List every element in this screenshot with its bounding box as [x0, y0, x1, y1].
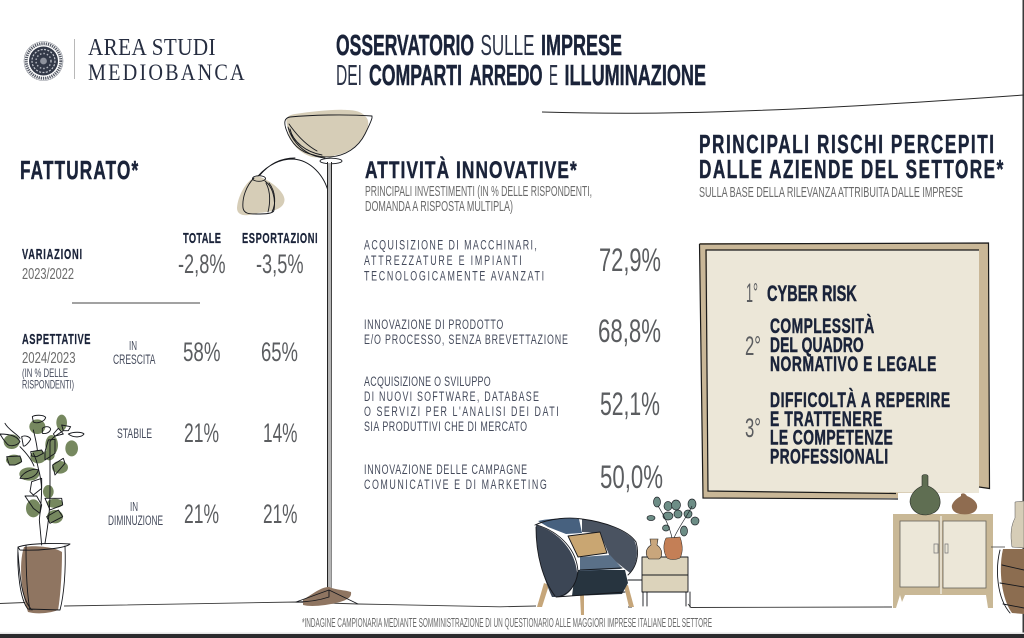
- logo wordmark: [88, 34, 245, 85]
- illustration: potted plant: [0, 415, 84, 613]
- lamp base: [296, 587, 358, 606]
- row: aspettative in crescita: 65%: [261, 337, 298, 367]
- panel: principali rischi: [699, 129, 1004, 499]
- heading: attività innovative: ATTIVITÀ INNOVATIVE*: [365, 157, 577, 184]
- item: macchinari 72,9%: 72,9%: [599, 242, 661, 278]
- title: IMPRESE: [541, 30, 622, 62]
- risk 3: competenze: 3°: [745, 413, 761, 443]
- row: variazioni: -3,5%: [256, 249, 304, 279]
- subheading: DOMANDA A RISPOSTA MULTIPLA): [365, 199, 513, 215]
- row: stabile: 21%: [184, 418, 219, 448]
- item: software 52,1%: SIA PRODUTTIVI CHE DI MERCATO: [364, 420, 527, 435]
- item: campagne 50,0%: [364, 459, 663, 495]
- title: ARREDO: [470, 60, 542, 92]
- risk 2: complessità: [745, 313, 936, 376]
- table: [628, 557, 690, 607]
- vase: green: [910, 474, 940, 515]
- risk 3: competenze: [745, 387, 950, 468]
- subheading: [365, 184, 592, 215]
- chair pillow: [568, 532, 607, 557]
- row: in diminuzione: 21%: [263, 499, 298, 529]
- row: variazioni: -2,8%: [178, 249, 226, 279]
- illustration: armchair: [535, 518, 638, 615]
- item: prodotto 68,8%: 68,8%: [598, 313, 661, 349]
- illustration: side table with vases and plant: [628, 497, 699, 607]
- risk 2: complessità: DEL QUADRO: [770, 333, 864, 357]
- title: OSSERVATORIO: [336, 30, 474, 62]
- risk 1: cyber risk: CYBER RISK: [767, 281, 857, 306]
- item: software 52,1%: [364, 375, 660, 435]
- column headers: [183, 230, 318, 247]
- column headers: ESPORTAZIONI: [242, 230, 318, 247]
- plant foliage: [0, 415, 84, 545]
- risk 3: competenze: LE COMPETENZE: [770, 426, 893, 449]
- lamp small shade: [237, 158, 329, 215]
- row: aspettative in crescita: CRESCITA: [113, 352, 156, 367]
- vase: brown: [952, 493, 977, 514]
- logo wordmark: AREA STUDI: [88, 34, 216, 60]
- risk 1: cyber risk: [746, 278, 857, 308]
- heading: principali rischi: [699, 129, 1004, 184]
- vase: terracotta: [664, 537, 682, 560]
- heading: principali rischi: DALLE AZIENDE DEL SETTORE*: [699, 154, 1004, 184]
- item: software 52,1%: O SERVIZI PER L'ANALISI DEI DATI: [364, 405, 559, 420]
- row: variazioni: 2023/2022: [22, 266, 74, 283]
- chair left wing: [536, 525, 577, 597]
- item: software 52,1%: DI NUOVI SOFTWARE, DATABASE: [364, 390, 539, 405]
- title: E: [549, 60, 558, 92]
- row: stabile: 14%: [263, 418, 298, 448]
- panel: fatturato: [20, 155, 318, 529]
- item: campagne 50,0%: COMUNICATIVE E DI MARKETING: [364, 478, 547, 493]
- row: aspettative in crescita: RISPONDENTI): [22, 378, 74, 392]
- title: DEI: [336, 60, 362, 92]
- item: macchinari 72,9%: ACQUISIZIONE DI MACCHINARI,: [364, 239, 537, 253]
- subheading: PRINCIPALI INVESTIMENTI (IN % DELLE RISPONDENTI,: [365, 184, 592, 200]
- eucalyptus plant: [647, 497, 699, 538]
- row: in diminuzione: DIMINUZIONE: [108, 513, 163, 528]
- floor line: [0, 602, 892, 608]
- logo: Area Studi Mediobanca: [24, 34, 245, 85]
- risk 3: competenze: E TRATTENERE: [770, 407, 882, 431]
- column headers: TOTALE: [183, 230, 221, 247]
- item: macchinari 72,9%: ATTREZZATURE E IMPIANTI: [364, 254, 522, 269]
- item: campagne 50,0%: 50,0%: [600, 459, 663, 495]
- risk 1: cyber risk: 1°: [746, 278, 758, 308]
- risk 2: complessità: COMPLESSITÀ: [770, 313, 874, 338]
- row: variazioni: VARIAZIONI: [22, 246, 82, 263]
- chair legs: [537, 583, 634, 615]
- row: stabile: [117, 418, 298, 448]
- panel: attività innovative: [364, 157, 663, 495]
- chair seat base: [572, 570, 628, 596]
- row: aspettative in crescita: [22, 331, 298, 392]
- heading: fatturato: FATTURATO*: [20, 155, 138, 185]
- row: in diminuzione: [108, 499, 298, 529]
- item: macchinari 72,9%: TECNOLOGICAMENTE AVANZATI: [364, 270, 544, 284]
- title: [336, 30, 706, 92]
- item: software 52,1%: ACQUISIZIONE O SVILUPPO: [364, 375, 491, 390]
- picture frame: [700, 243, 990, 499]
- illustration: cabinet with vases: [893, 474, 1024, 614]
- row: aspettative in crescita: (IN % DELLE: [22, 366, 68, 380]
- risk 3: competenze: PROFESSIONALI: [770, 445, 888, 468]
- heading: principali rischi: PRINCIPALI RISCHI PERCEPITI: [699, 129, 994, 159]
- row: in diminuzione: IN: [130, 499, 138, 514]
- title: SULLE: [480, 30, 534, 62]
- risk 2: complessità: NORMATIVO E LEGALE: [770, 352, 936, 376]
- item: campagne 50,0%: INNOVAZIONE DELLE CAMPAGNE: [364, 463, 527, 478]
- vase: pale: [1011, 501, 1024, 548]
- item: macchinari 72,9%: [364, 239, 661, 284]
- row: in diminuzione: 21%: [184, 499, 219, 529]
- plant pot: [18, 543, 70, 613]
- chair seat cushion: [580, 555, 622, 571]
- risk 3: competenze: DIFFICOLTÀ A REPERIRE: [770, 387, 950, 412]
- logo wordmark: MEDIOBANCA: [88, 60, 245, 85]
- chair top back: [538, 518, 582, 534]
- row: aspettative in crescita: 2024/2023: [22, 350, 76, 367]
- item: software 52,1%: 52,1%: [600, 386, 660, 422]
- row: variazioni: [22, 246, 304, 283]
- icon: Mediobanca seal: [24, 42, 63, 80]
- item: prodotto 68,8%: INNOVAZIONE DI PRODOTTO: [364, 318, 503, 333]
- row: aspettative in crescita: 58%: [183, 337, 220, 367]
- chair right back: [582, 519, 637, 573]
- vase: tan: [646, 539, 662, 559]
- title: ILLUMINAZIONE: [564, 60, 706, 92]
- title: COMPARTI: [369, 60, 462, 92]
- barrel: [997, 549, 1024, 614]
- row: stabile: STABILE: [117, 426, 152, 441]
- cabinet body: [893, 514, 993, 608]
- item: prodotto 68,8%: E/O PROCESSO, SENZA BREVETTAZIONE: [364, 333, 568, 348]
- row: aspettative in crescita: IN: [129, 338, 137, 353]
- risk 2: complessità: 2°: [745, 331, 761, 361]
- lamp large shade: [285, 110, 372, 164]
- row: aspettative in crescita: ASPETTATIVE: [22, 331, 91, 348]
- item: prodotto 68,8%: [364, 313, 661, 349]
- illustration: floor lamp: [237, 110, 372, 606]
- lamp stem: [328, 162, 332, 590]
